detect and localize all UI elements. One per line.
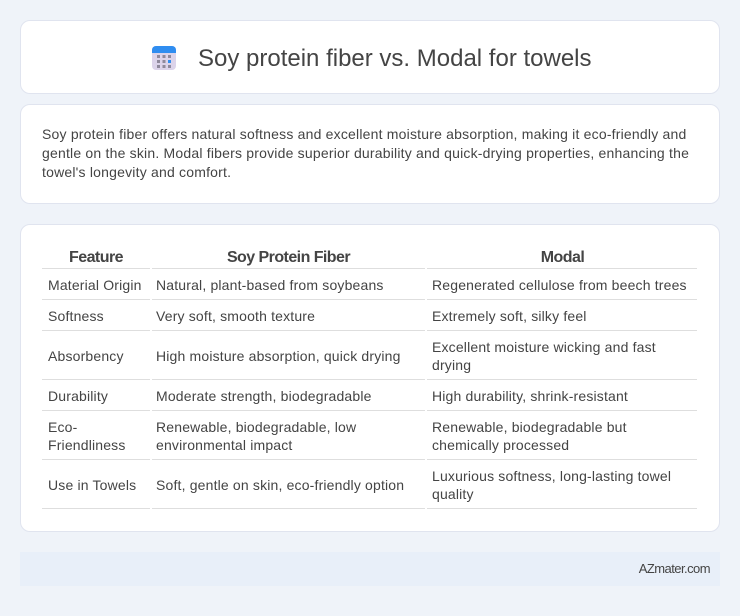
row: material origin: Natural, plant-based from soybeans (156, 277, 384, 293)
intro text: towel's longevity and comfort. (42, 164, 231, 180)
row: material origin: Material Origin (48, 277, 142, 293)
row: eco-friendliness: Eco- (48, 419, 77, 435)
comparison table panel (20, 224, 720, 532)
row: durability: High durability, shrink-resistant (432, 388, 628, 404)
row: absorbency: drying (432, 357, 471, 373)
row: material origin: Regenerated cellulose from beech trees (432, 277, 687, 293)
row: durability (48, 388, 628, 404)
row: use in towels: quality (432, 486, 474, 502)
row: eco-friendliness: chemically processed (432, 437, 569, 453)
row: eco-friendliness: Friendliness (48, 437, 126, 453)
intro panel (20, 104, 720, 204)
row: softness: Extremely soft, silky feel (432, 308, 587, 324)
row: material origin (48, 277, 687, 293)
header panel (20, 20, 720, 94)
intro text (42, 126, 689, 180)
footer credit: AZmater.com (639, 561, 710, 576)
title: Soy protein fiber vs. Modal for towels (198, 45, 592, 72)
row: absorbency (48, 339, 656, 373)
row: use in towels: Soft, gentle on skin, eco-friendly option (156, 477, 404, 493)
row: eco-friendliness: Renewable, biodegradable but (432, 419, 627, 435)
table header: Feature (69, 249, 123, 266)
intro text: gentle on the skin. Modal fibers provide superior durability and quick-drying properties, enhancing the (42, 145, 689, 161)
table header (69, 249, 584, 266)
row: softness: Very soft, smooth texture (156, 308, 315, 324)
row: durability: Durability (48, 388, 108, 404)
row: eco-friendliness: Renewable, biodegradable, low (156, 419, 356, 435)
table header: Soy Protein Fiber (227, 249, 350, 266)
row: softness (48, 308, 587, 324)
row: absorbency: Excellent moisture wicking and fast (432, 339, 656, 355)
row: eco-friendliness: environmental impact (156, 437, 292, 453)
row: use in towels (48, 468, 671, 502)
intro text: Soy protein fiber offers natural softness and excellent moisture absorption, making it eco-friendly and (42, 126, 686, 142)
row: use in towels: Luxurious softness, long-lasting towel (432, 468, 671, 484)
row: absorbency: Absorbency (48, 348, 124, 364)
row: absorbency: High moisture absorption, quick drying (156, 348, 401, 364)
footer bar (20, 552, 720, 586)
row: durability: Moderate strength, biodegradable (156, 388, 372, 404)
row: eco-friendliness (48, 419, 627, 453)
row: use in towels: Use in Towels (48, 477, 136, 493)
icon: calendar (152, 46, 176, 70)
table header: Modal (541, 249, 584, 266)
row: softness: Softness (48, 308, 104, 324)
